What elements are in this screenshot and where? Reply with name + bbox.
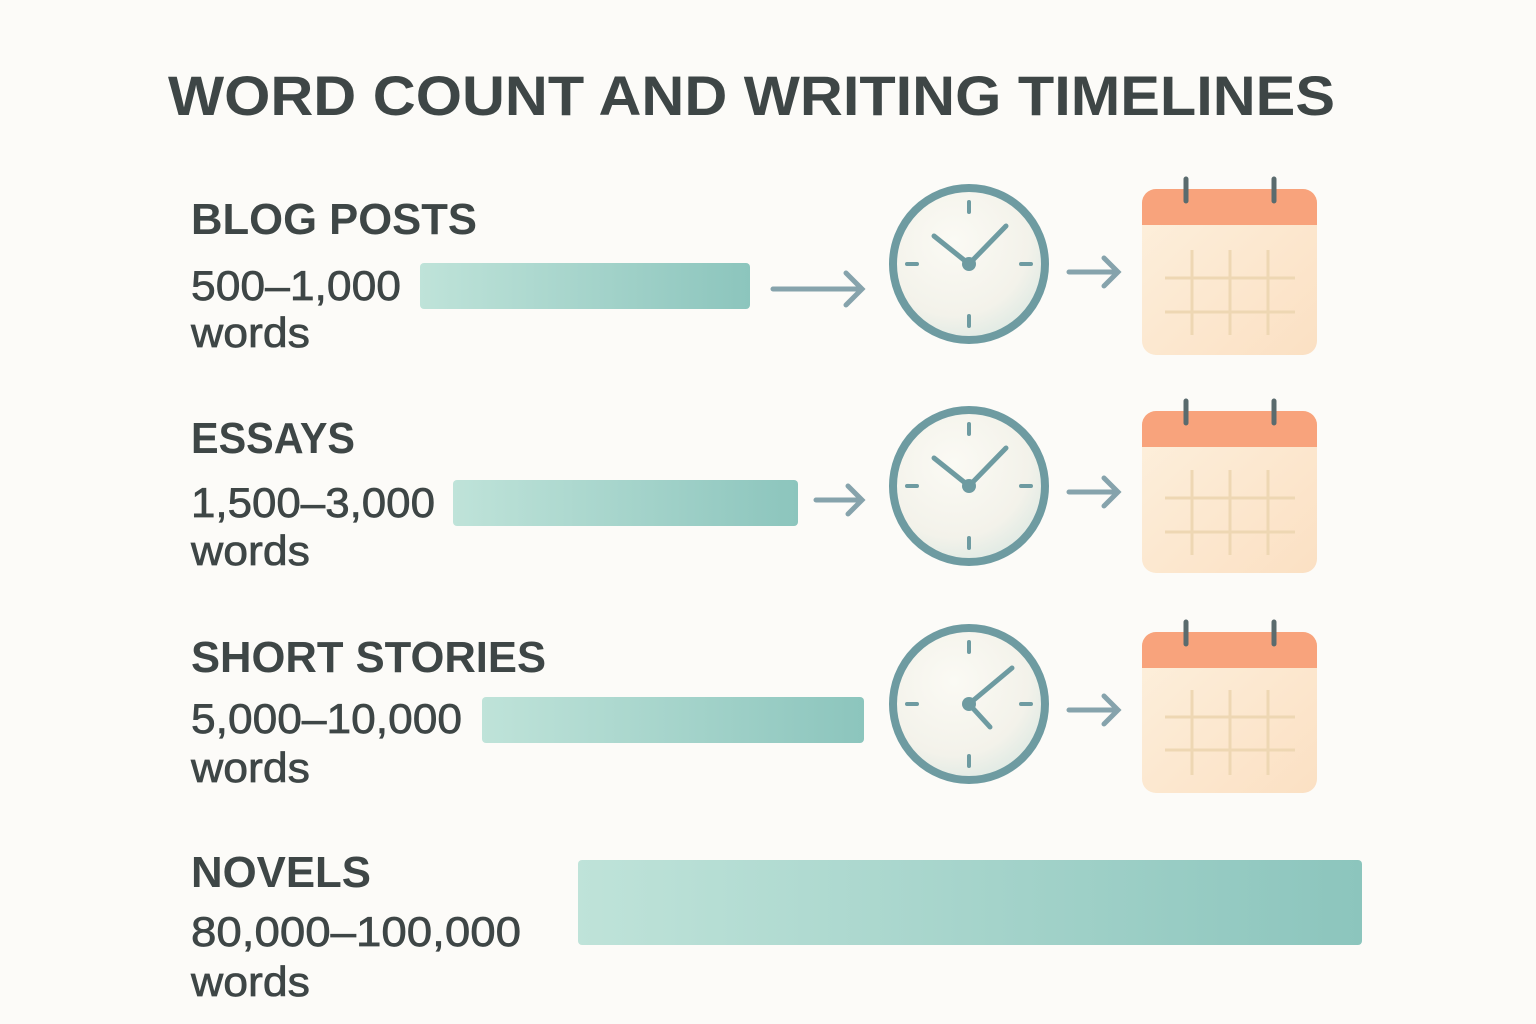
icon: clock <box>893 410 1045 562</box>
word count: short stories: 5,000–10,000 <box>191 695 462 742</box>
row: essays <box>190 401 1317 574</box>
icon: clock <box>893 628 1045 780</box>
icon: clock <box>893 188 1045 340</box>
arrow <box>1069 258 1118 286</box>
bar: blog posts <box>420 263 750 309</box>
heading: novels: NOVELS <box>191 848 371 897</box>
icon: calendar <box>1142 179 1317 355</box>
label: words: words <box>190 958 310 1005</box>
word count: novels: 80,000–100,000 <box>191 908 521 955</box>
label: words: words <box>190 527 310 574</box>
bar: short stories <box>482 697 864 743</box>
row: novels <box>190 848 1362 1005</box>
word count: essays: 1,500–3,000 <box>191 479 435 526</box>
label: words: words <box>190 309 310 356</box>
arrow <box>1069 478 1118 506</box>
row: blog posts <box>190 179 1317 356</box>
title: WORD COUNT AND WRITING TIMELINES <box>168 64 1335 127</box>
bar: essays <box>453 480 798 526</box>
icon: calendar <box>1142 401 1317 573</box>
arrow <box>773 273 862 305</box>
heading: blog posts: BLOG POSTS <box>191 195 477 244</box>
row: short stories <box>190 622 1317 793</box>
heading: essays: ESSAYS <box>191 414 355 463</box>
word count: blog posts: 500–1,000 <box>191 262 401 309</box>
arrow <box>1069 696 1118 724</box>
bar: novels <box>578 860 1362 945</box>
heading: short stories: SHORT STORIES <box>191 633 546 682</box>
label: words: words <box>190 744 310 791</box>
icon: calendar <box>1142 622 1317 793</box>
arrow <box>816 486 862 514</box>
